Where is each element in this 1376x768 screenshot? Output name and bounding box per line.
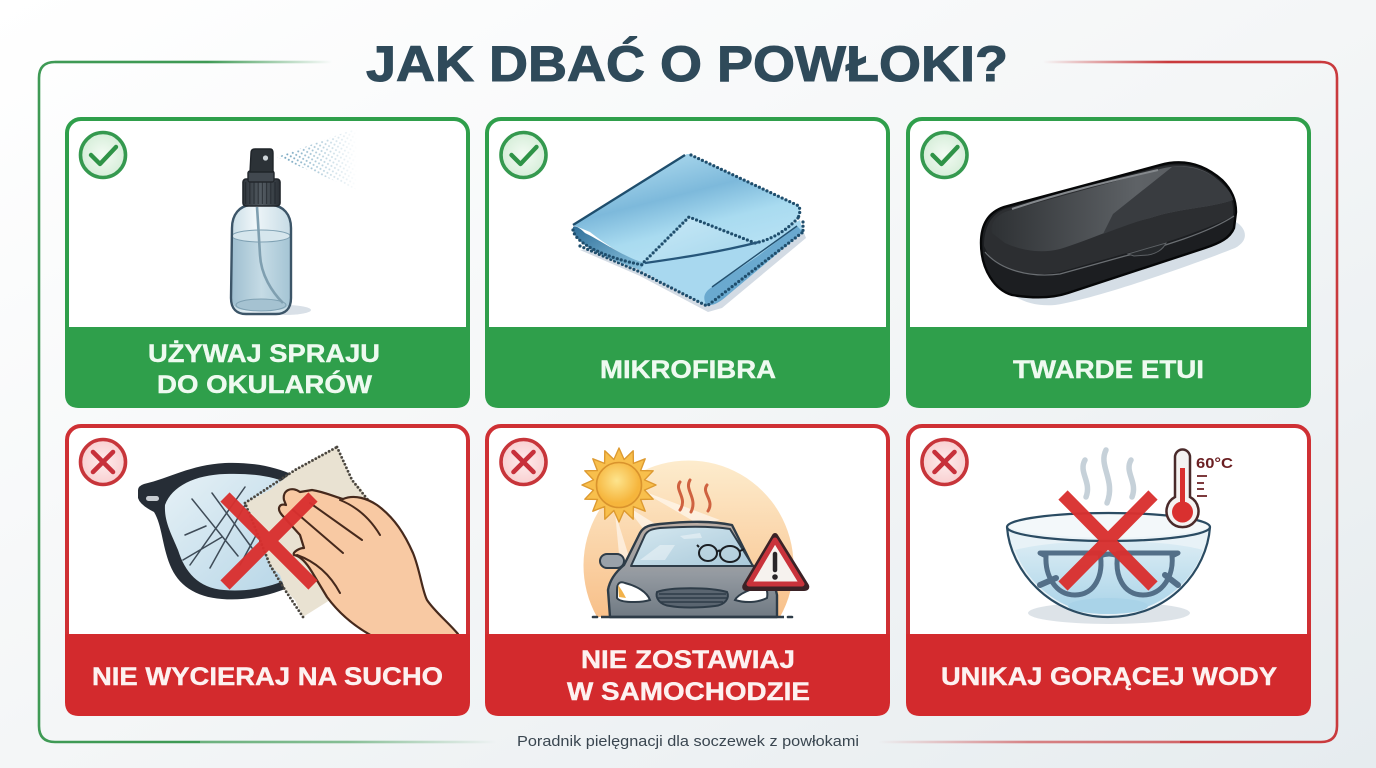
icon: cross — [922, 440, 967, 484]
panel: do not leave in car — [485, 426, 890, 716]
label: spray — [148, 340, 380, 399]
label band: microfibre — [485, 327, 890, 408]
label: do not wipe dry: NIE WYCIERAJ NA SUCHO — [92, 663, 443, 691]
icon: check — [922, 132, 967, 178]
label: spray: UŻYWAJ SPRAJU — [148, 340, 380, 368]
label: do not leave in car: NIE ZOSTAWIAJ — [581, 646, 795, 674]
icon: hard case — [981, 162, 1245, 305]
panel: microfibre — [485, 119, 890, 408]
icon: thermometer — [1167, 450, 1198, 527]
icon: microfibre cloth — [573, 154, 806, 312]
title: JAK DBAĆ O POWŁOKI? — [366, 36, 1008, 92]
icon: warning triangle — [745, 536, 806, 588]
icon: check — [80, 132, 126, 178]
temperature label: 60°C — [1196, 455, 1233, 472]
label band: avoid hot water — [906, 634, 1311, 716]
label band: do not leave in car — [485, 634, 890, 716]
label band: do not wipe dry — [65, 634, 470, 716]
label: do not leave in car — [567, 646, 810, 706]
panel: do not wipe dry — [65, 426, 470, 716]
icon: glasses in hot water bowl — [1007, 450, 1233, 624]
glasses on dashboard — [697, 545, 744, 562]
scratches — [183, 487, 260, 568]
icon: cross — [80, 440, 126, 484]
label band: hard case — [906, 327, 1311, 408]
footer caption: Poradnik pielęgnacji dla soczewek z powłokami — [517, 734, 859, 750]
label: hard case: TWARDE ETUI — [1013, 356, 1204, 384]
icon: spray bottle — [231, 128, 357, 315]
panel: avoid hot water — [906, 426, 1311, 716]
label band: spray — [65, 327, 470, 408]
icon: car in the sun — [582, 448, 806, 617]
icon: check — [501, 132, 546, 178]
label: avoid hot water: UNIKAJ GORĄCEJ WODY — [941, 663, 1277, 691]
submerged glasses — [1040, 553, 1178, 595]
label: spray: DO OKULARÓW — [157, 369, 372, 399]
panel: hard case — [906, 119, 1311, 408]
icon: cross — [501, 440, 546, 484]
car — [600, 522, 777, 617]
icon: glasses wiped with dry cloth — [138, 447, 458, 640]
label: do not leave in car: W SAMOCHODZIE — [567, 678, 810, 706]
label: microfibre: MIKROFIBRA — [600, 356, 776, 384]
panel: spray — [65, 119, 470, 408]
